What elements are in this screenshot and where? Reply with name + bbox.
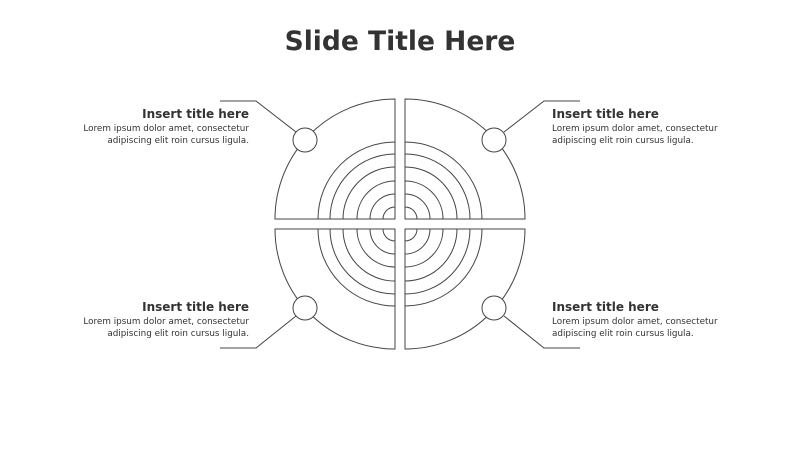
quadrant: bottom-left [275,229,395,349]
text: top-right [552,107,718,146]
text: bottom-left: Insert title here [142,300,249,314]
text: top-right: Lorem ipsum dolor amet, consectetur [552,124,718,134]
text: bottom-right: adipiscing elit roin cursus ligula. [552,329,694,339]
text: bottom-left [83,300,249,339]
quadrant: top-right [405,99,525,219]
text: top-right: Insert title here [552,107,659,121]
title: Slide Title Here [285,26,515,57]
text: bottom-right: Lorem ipsum dolor amet, consectetur [552,317,718,327]
text: bottom-right: Insert title here [552,300,659,314]
quadrant: top-left [275,99,395,219]
text: top-left: Lorem ipsum dolor amet, consectetur [83,124,249,134]
text: top-left: adipiscing elit roin cursus ligula. [107,136,249,146]
quadrant: bottom-right [405,229,525,349]
text: bottom-left: adipiscing elit roin cursus ligula. [107,329,249,339]
connector: bottom-left [220,296,317,348]
connector: bottom-right [482,296,580,348]
text: top-left [83,107,249,146]
text: bottom-right [552,300,718,339]
connector: top-left [220,101,317,152]
text: top-right: adipiscing elit roin cursus ligula. [552,136,694,146]
connector: top-right [482,101,580,152]
text: top-left: Insert title here [142,107,249,121]
text: bottom-left: Lorem ipsum dolor amet, consectetur [83,317,249,327]
